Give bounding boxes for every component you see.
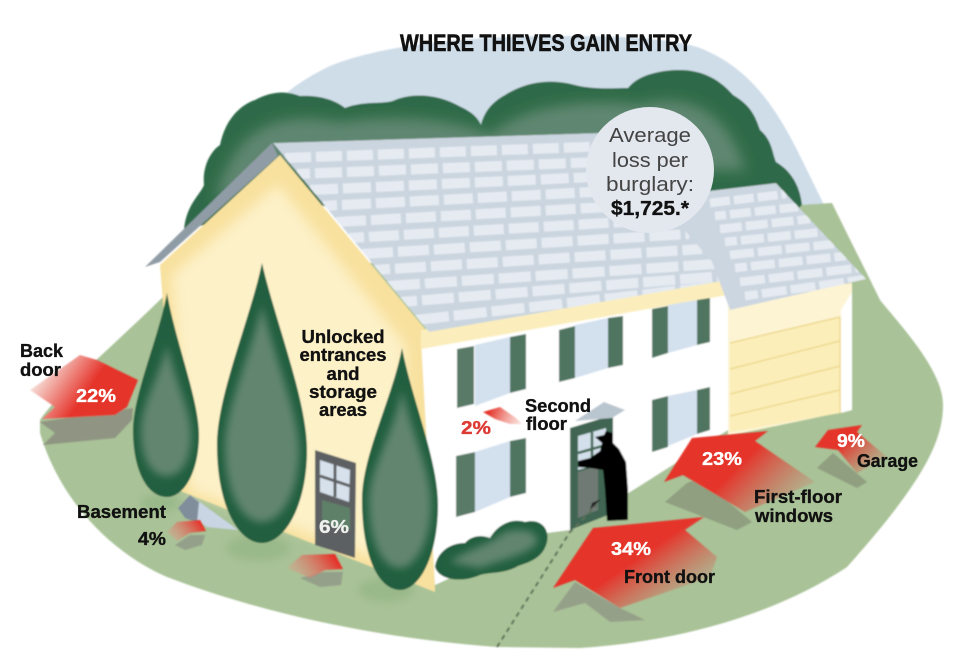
front door [570, 415, 613, 530]
tool arrow [590, 499, 601, 510]
label: unlocked entrances: and [326, 364, 360, 384]
label: unlocked entrances: areas [319, 400, 367, 420]
storage door [315, 450, 356, 558]
label: first-floor windows: First-floor [754, 486, 842, 507]
arrow: first-floor windows [664, 431, 815, 530]
lawn [40, 203, 943, 648]
sky blob [240, 36, 834, 300]
basement hatch [178, 495, 238, 530]
callout: average loss: burglary: [606, 174, 694, 196]
garage wall [728, 283, 852, 436]
label: second floor: Second [525, 395, 591, 416]
callout: average loss: $1,725.* [611, 198, 689, 220]
window upper middle [559, 316, 623, 382]
label: unlocked entrances: entrances [300, 345, 386, 365]
main roof [273, 133, 728, 332]
gable fascia [145, 143, 278, 267]
arrow: unlocked entrances [287, 554, 343, 587]
windows [456, 298, 710, 517]
window lower left [456, 438, 526, 517]
tree left [133, 293, 199, 497]
label: back door: door [20, 359, 61, 380]
front wall [421, 285, 728, 585]
tree right [362, 348, 438, 590]
arrow: second floor [483, 407, 522, 424]
label: unlocked entrances: Unlocked [302, 327, 384, 347]
thief silhouette [578, 431, 628, 521]
portico [575, 402, 625, 421]
label: garage: Garage [857, 450, 918, 471]
arrow: back door [30, 355, 138, 445]
label: front door percent: 34% [611, 539, 651, 559]
callout: average loss: Average [609, 125, 691, 147]
lawn shadows [140, 494, 414, 602]
back trees [184, 70, 802, 300]
tree middle [217, 263, 307, 543]
arrow: front door [553, 517, 717, 622]
label: first-floor percent: 23% [702, 449, 742, 469]
garage door [730, 317, 840, 432]
callout: average loss: loss per [612, 150, 688, 172]
label: basement percent: 4% [138, 528, 166, 549]
callout: average loss [586, 107, 714, 233]
garage roof [700, 183, 866, 310]
shrub [435, 521, 548, 580]
garage frame white [841, 292, 852, 413]
walkway dashed line [497, 505, 597, 647]
label: back door: Back [20, 340, 64, 361]
title: WHERE THIEVES GAIN ENTRY [400, 30, 692, 57]
gable wall [160, 155, 435, 592]
label: first-floor windows: windows [754, 505, 833, 526]
roof valley [600, 133, 735, 308]
label: garage percent: 9% [837, 431, 865, 451]
label: back door percent: 22% [76, 386, 116, 406]
window lower right [652, 387, 710, 452]
eave trim [421, 278, 728, 349]
label: basement: Basement [77, 501, 166, 522]
window upper right [652, 298, 710, 358]
window upper left [457, 334, 526, 408]
label: second floor percent: 2% [461, 418, 491, 438]
label: unlocked entrances: storage [309, 382, 377, 402]
label: second floor: floor [526, 413, 567, 434]
arrow: garage [815, 425, 887, 488]
arrow: basement [167, 520, 206, 550]
label: front door: Front door [624, 566, 715, 587]
label: storage percent: 6% [319, 517, 349, 537]
